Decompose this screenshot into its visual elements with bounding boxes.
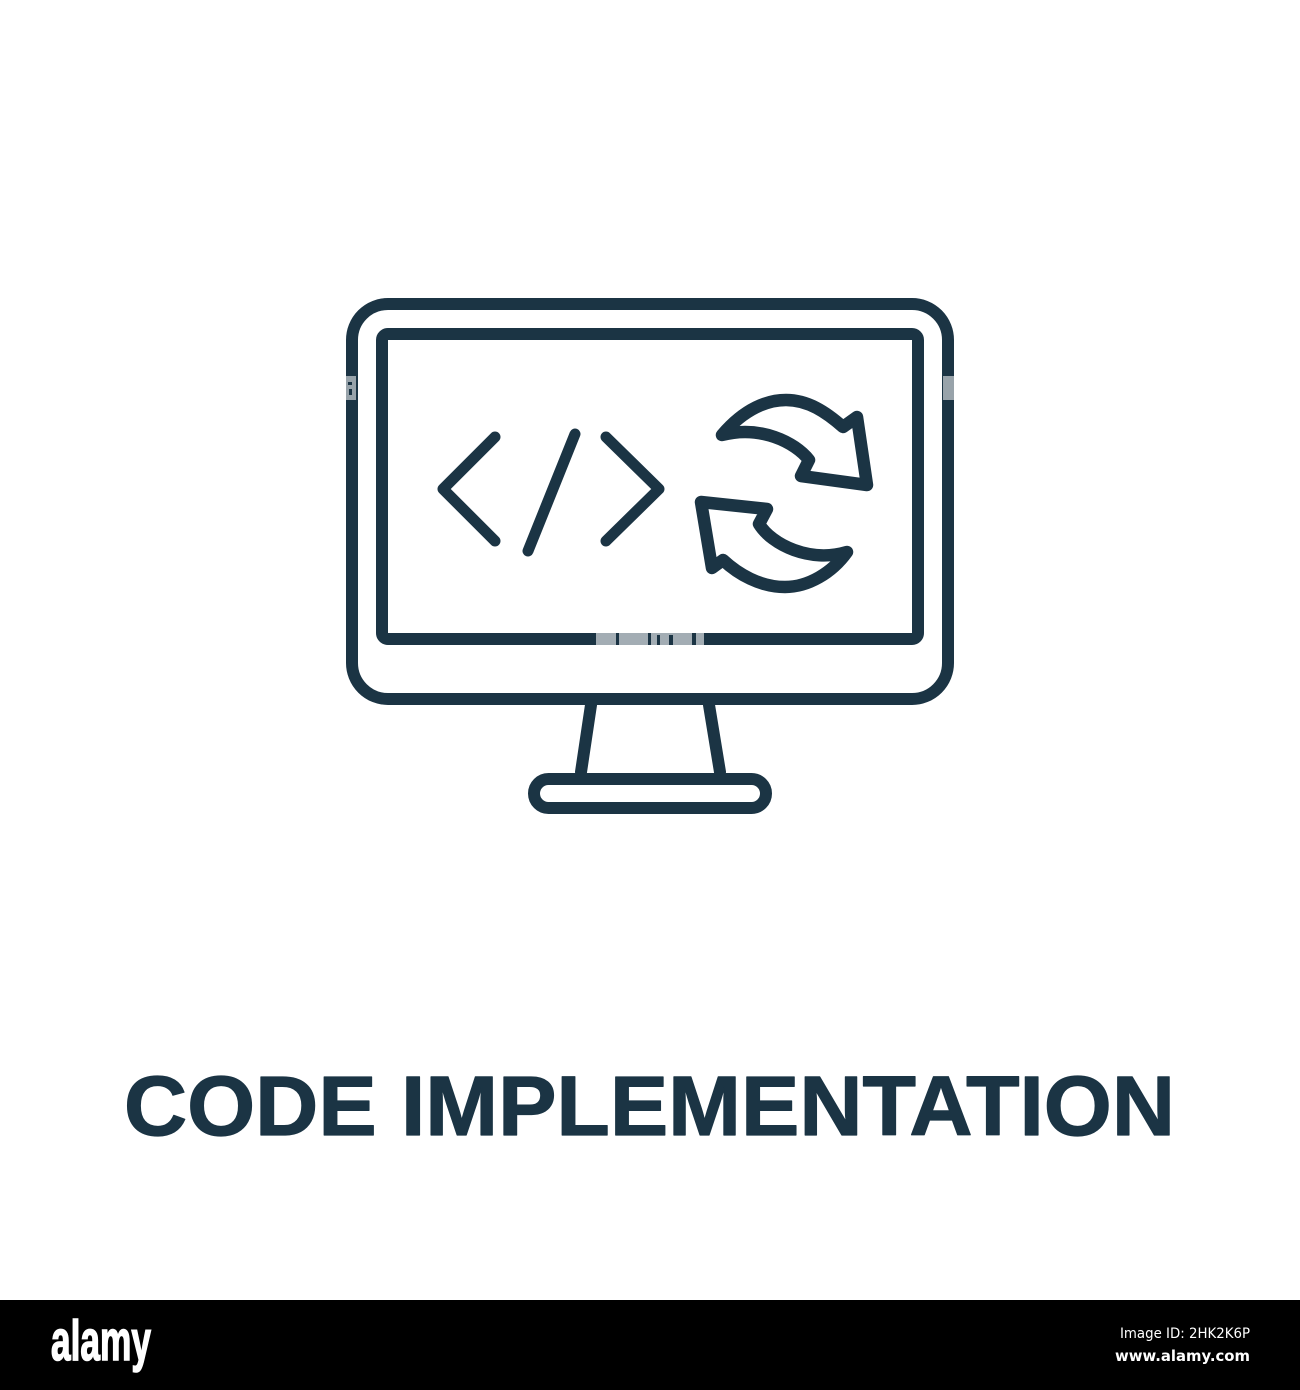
title: CODE IMPLEMENTATION bbox=[124, 1059, 1175, 1153]
monitor base bbox=[534, 779, 766, 808]
monitor screen bbox=[382, 334, 918, 639]
monitor outer frame bbox=[352, 304, 948, 699]
website: www.alamy.com bbox=[1115, 1347, 1250, 1365]
footer logo: alamy bbox=[51, 1309, 151, 1373]
monitor stand bbox=[581, 705, 720, 772]
footer bar bbox=[0, 1300, 1300, 1390]
icon: top refresh arrow bbox=[722, 400, 867, 485]
icon: code brackets and slash bbox=[443, 434, 659, 551]
watermark fragments over monitor frame bbox=[345, 376, 954, 645]
image id: Image ID: 2HK2K6P bbox=[1120, 1326, 1250, 1342]
icon: bottom refresh arrow bbox=[701, 502, 847, 587]
icon: computer monitor with code and refresh arrows bbox=[352, 304, 948, 808]
